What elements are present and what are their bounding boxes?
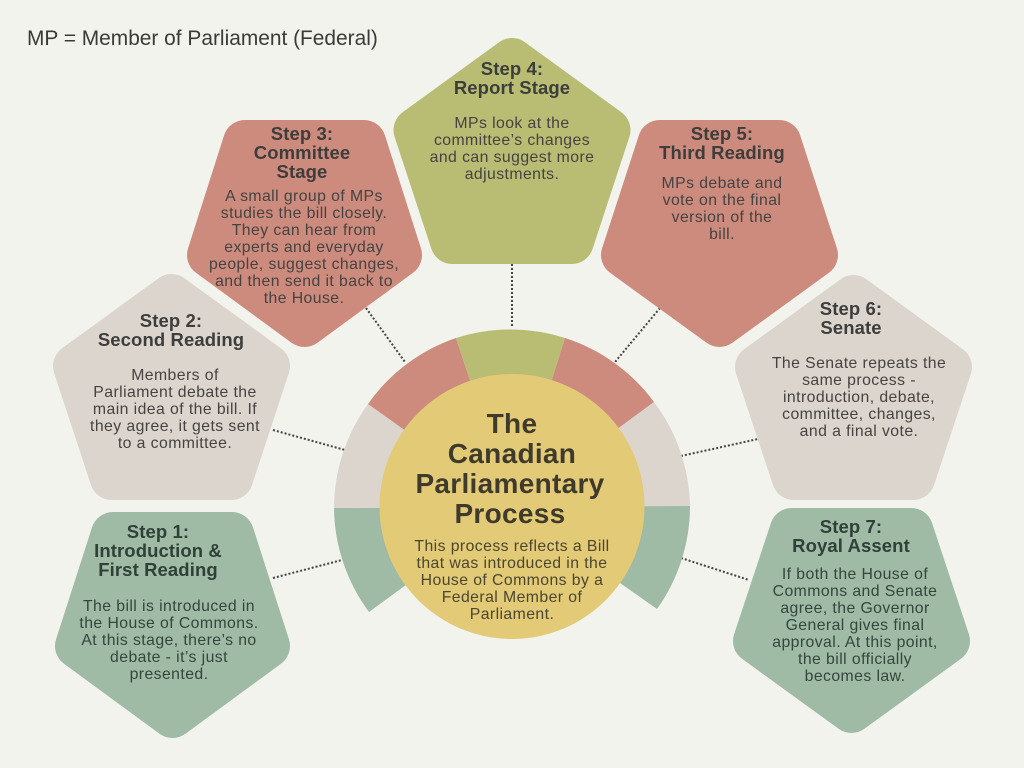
- panel: step 1 introduction and first reading: debate - it’s just: [110, 649, 228, 666]
- panel: step 5 third reading: version of the: [672, 209, 772, 226]
- panel: step 5 third reading: bill.: [709, 226, 735, 243]
- main title: The: [487, 408, 537, 439]
- connector: step 7: [681, 558, 749, 580]
- panel: step 3 committee stage: and then send it back to: [215, 273, 393, 290]
- connector: step 4: [511, 264, 513, 326]
- panel: step 1 introduction and first reading: First Reading: [98, 559, 218, 580]
- panel: step 4 report stage: Report Stage: [454, 77, 570, 98]
- description: Federal Member of: [442, 589, 582, 606]
- panel: step 7 royal assent: approval. At this point,: [772, 634, 938, 651]
- connector: step 3: [366, 308, 405, 362]
- panel: step 7 royal assent: [755, 516, 948, 711]
- panel: step 5 third reading: vote on the final: [663, 192, 781, 209]
- panel: step 1 introduction and first reading: The bill is introduced in: [83, 598, 255, 615]
- panel: step 6 senate: same process -: [802, 372, 916, 389]
- main title: Parliamentary: [415, 468, 605, 499]
- panel: step 2 second reading: Second Reading: [98, 329, 244, 350]
- connector: step 1: [273, 560, 342, 578]
- panel: step 3 committee stage: A small group of MPs: [225, 188, 383, 205]
- panel: step 2 second reading: they agree, it gets sent: [90, 418, 260, 435]
- panel: step 2 second reading: Members of: [131, 367, 219, 384]
- legend note: MP definition: MP = Member of Parliament (Federal): [27, 27, 378, 50]
- panel: step 7 royal assent: General gives final: [786, 617, 924, 634]
- panel: step 2 second reading: Step 2:: [140, 310, 202, 331]
- panel: step 7 royal assent: Step 7:: [820, 516, 882, 537]
- panel: step 3 committee stage: They can hear from: [232, 222, 376, 239]
- panel: step 7 royal assent: becomes law.: [805, 668, 905, 685]
- main title: [415, 408, 605, 529]
- panel: step 6 senate: [757, 297, 950, 478]
- description: that was introduced in the: [417, 555, 607, 572]
- panel: step 1 introduction and first reading: the House of Commons.: [79, 615, 259, 632]
- panel: step 1 introduction and first reading: Step 1:: [127, 521, 189, 542]
- panel: step 3 committee stage: experts and everyday: [224, 239, 384, 256]
- panel: step 6 senate: The Senate repeats the: [772, 355, 946, 372]
- connector: step 2: [273, 430, 345, 450]
- panel: step 3 committee stage: Stage: [277, 161, 327, 182]
- panel: step 3 committee stage: the House.: [264, 290, 344, 307]
- panel: step 4 report stage: MPs look at the: [454, 115, 570, 132]
- panel: step 1 introduction and first reading: presented.: [130, 666, 208, 683]
- panel: step 6 senate: introduction, debate,: [783, 389, 935, 406]
- panel: step 4 report stage: committee’s changes: [434, 132, 590, 149]
- panel: step 2 second reading: Parliament debate the: [93, 384, 257, 401]
- center circle: process title and description: [380, 374, 644, 639]
- panel: step 2 second reading: to a committee.: [118, 435, 232, 452]
- connector: step 6: [681, 439, 758, 456]
- chart: semicircular ring of step segments: [334, 329, 690, 612]
- panel: step 7 royal assent: If both the House of: [782, 566, 928, 583]
- description: House of Commons by a: [421, 572, 603, 589]
- panel: step 1 introduction and first reading: Introduction &: [94, 540, 222, 561]
- panel: step 5 third reading: MPs debate and: [662, 175, 782, 192]
- panel: step 7 royal assent: Commons and Senate: [773, 583, 937, 600]
- panel: step 5 third reading: Step 5:: [691, 123, 753, 144]
- main title: Process: [454, 498, 566, 529]
- panel: step 4 report stage: and can suggest more: [430, 149, 594, 166]
- panel: step 3 committee stage: Step 3:: [271, 123, 333, 144]
- panel: step 3 committee stage: studies the bill closely.: [221, 205, 387, 222]
- panel: step 4 report stage: [416, 58, 608, 242]
- connector: step 5: [615, 308, 660, 362]
- panel: step 3 committee stage: [209, 123, 400, 325]
- panel: step 5 third reading: Third Reading: [659, 142, 785, 163]
- description: Parliament.: [470, 606, 554, 623]
- panel: step 6 senate: and a final vote.: [800, 423, 918, 440]
- panel: step 4 report stage: Step 4:: [481, 58, 543, 79]
- panel: step 4 report stage: adjustments.: [465, 166, 559, 183]
- panel: step 2 second reading: main idea of the bill. If: [93, 401, 257, 418]
- panel: step 7 royal assent: agree, the Governor: [780, 600, 930, 617]
- panel: step 6 senate: committee, changes,: [782, 406, 936, 423]
- panel: step 6 senate: Senate: [820, 317, 882, 338]
- panel: step 3 committee stage: people, suggest changes,: [209, 256, 399, 273]
- panel: step 7 royal assent: Royal Assent: [792, 535, 910, 556]
- panel: step 1 introduction and first reading: At this stage, there’s no: [81, 632, 257, 649]
- panel: step 5 third reading: [623, 123, 816, 325]
- main title: Canadian: [448, 438, 576, 469]
- description: [414, 538, 610, 623]
- panel: step 1 introduction and first reading: [77, 521, 268, 716]
- panel: step 3 committee stage: Committee: [254, 142, 350, 163]
- description: This process reflects a Bill: [414, 538, 610, 555]
- panel: step 2 second reading: [75, 296, 268, 478]
- panel: step 7 royal assent: the bill officially: [798, 651, 912, 668]
- panel: step 6 senate: Step 6:: [820, 298, 882, 319]
